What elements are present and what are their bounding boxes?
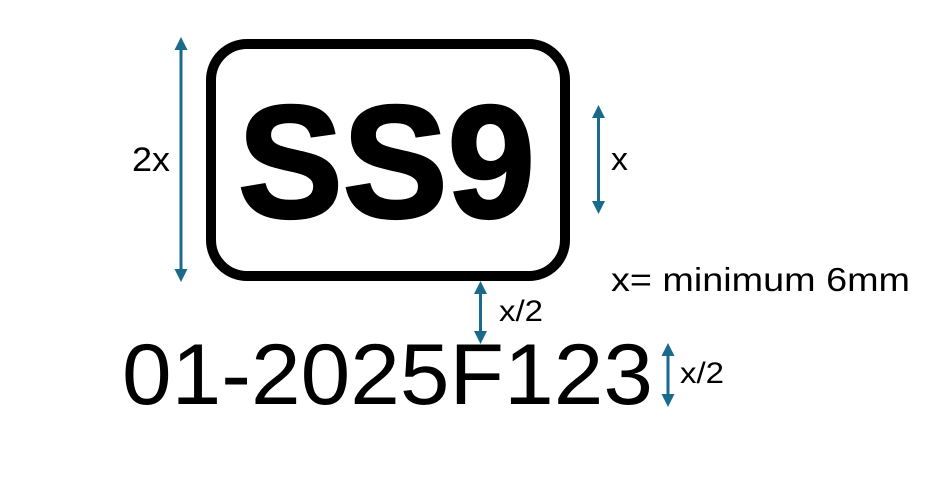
- dimension label: x/2 gap: x/2: [499, 295, 543, 328]
- arrow: x height: [592, 105, 605, 214]
- dimension label: 2x: 2x: [132, 141, 170, 179]
- label box: [211, 44, 565, 276]
- dimension label: x/2 text height: x/2: [680, 357, 724, 390]
- dimension label: x: x: [611, 141, 628, 177]
- code number: 01-2025F123: [122, 327, 653, 423]
- arrow: 2x height: [174, 37, 188, 282]
- arrow: x/2 text height: [662, 343, 674, 407]
- label text: SS9: SS9: [238, 72, 535, 251]
- arrow: x/2 gap: [474, 281, 487, 344]
- minimum size note: x= minimum 6mm: [611, 261, 910, 298]
